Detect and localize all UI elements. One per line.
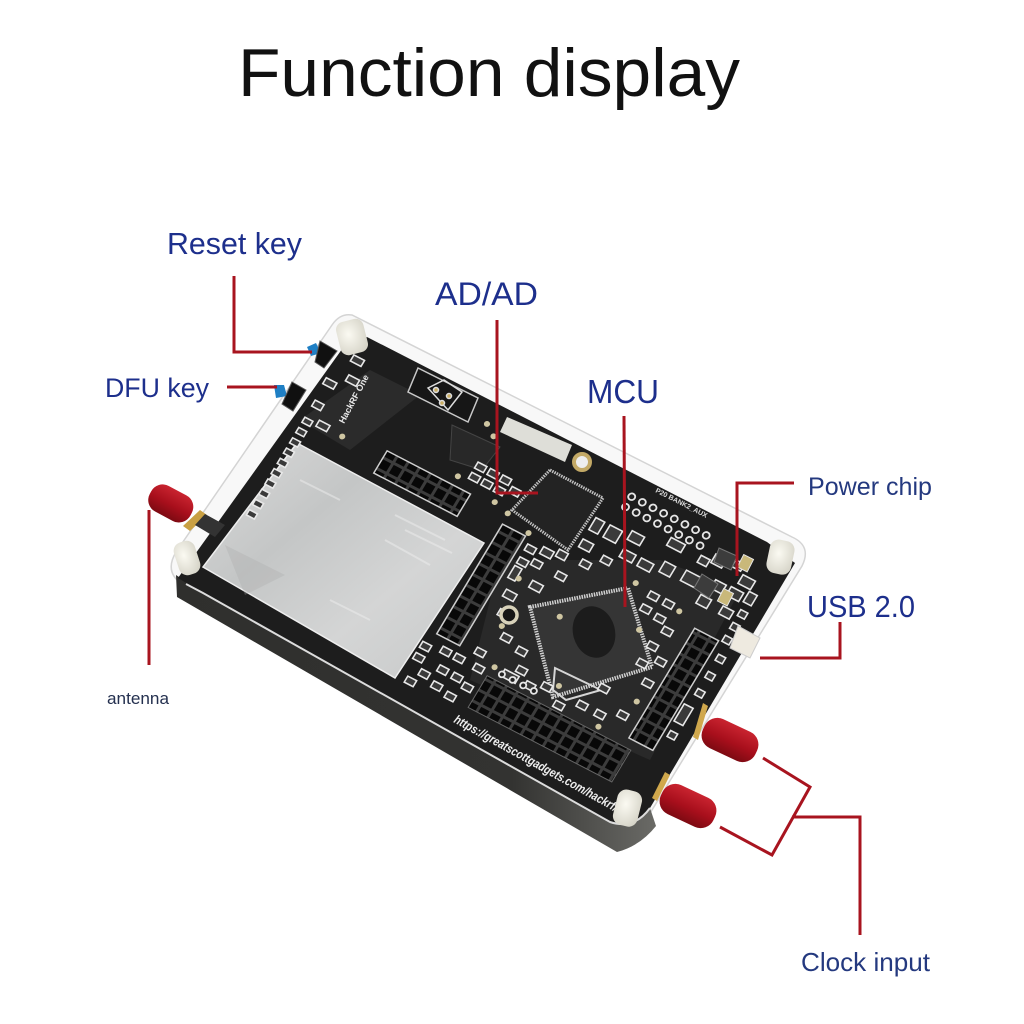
shield scratches	[300, 480, 452, 620]
standoff top	[334, 317, 370, 357]
MCU die mark	[567, 601, 621, 663]
label: Clock input: Clock input	[801, 947, 931, 977]
lower dark plate	[176, 575, 656, 852]
antenna line	[148, 510, 150, 665]
gold ring	[574, 454, 590, 470]
gold vias	[266, 366, 732, 740]
through-hole rows	[498, 483, 711, 726]
standoff bottom	[611, 788, 644, 829]
gold collar lower	[652, 772, 670, 801]
callout lines	[149, 276, 860, 935]
label: MCU: MCU	[587, 373, 659, 410]
AD chip	[512, 470, 603, 550]
inductor 2	[694, 574, 718, 598]
board-aligned components	[206, 345, 779, 804]
centre header	[437, 524, 526, 646]
label: Reset key: Reset key	[167, 226, 302, 261]
bottom header	[468, 676, 631, 782]
header P20	[374, 451, 471, 516]
power connector outline	[408, 368, 478, 422]
USB connector	[730, 626, 760, 658]
top pin pad	[428, 380, 462, 410]
AD/AD line	[497, 320, 538, 493]
power capacitors	[717, 554, 754, 606]
PCB edge highlight	[186, 584, 650, 824]
square chip	[450, 425, 500, 470]
clock input bracket	[720, 758, 860, 935]
board name text: HackRF One	[337, 373, 371, 425]
label patch	[500, 417, 572, 462]
label: Power chip: Power chip	[808, 473, 932, 501]
gold collar upper	[693, 703, 708, 740]
MCU white tape	[553, 668, 601, 700]
url text: https://greatscottgadgets.com/hackrf/	[452, 712, 621, 815]
USB line	[760, 622, 840, 658]
acrylic top plate	[171, 315, 805, 845]
device: HackRF board in acrylic case	[144, 315, 805, 852]
MCU line	[624, 416, 625, 607]
white SMD pads	[206, 349, 776, 804]
power chip line	[737, 483, 794, 576]
reset key line	[234, 276, 312, 352]
title: Function display	[238, 35, 740, 111]
bank label text: P20 BANK2_AUX	[654, 488, 709, 520]
label: AD/AD: AD/AD	[435, 276, 538, 312]
standoff left	[171, 538, 203, 578]
antenna connector left	[144, 480, 225, 537]
clock connector lower	[655, 779, 721, 833]
MCU chip	[530, 588, 652, 700]
reset button	[307, 341, 337, 368]
shield can	[203, 443, 484, 678]
label: USB 2.0: USB 2.0	[807, 589, 915, 624]
gloss reflection	[300, 370, 420, 450]
inductor 1	[714, 548, 737, 570]
label: DFU key: DFU key	[105, 373, 209, 403]
DFU key line	[227, 386, 277, 388]
right header	[629, 628, 719, 750]
mounting ring	[501, 607, 517, 623]
label: antenna: antenna	[107, 689, 170, 708]
lighter PCB zone	[470, 560, 740, 760]
standoff right	[765, 538, 796, 576]
PCB	[178, 337, 795, 823]
shield shadow patch	[225, 545, 285, 595]
DFU button	[274, 382, 306, 411]
clock connector upper	[697, 713, 763, 767]
